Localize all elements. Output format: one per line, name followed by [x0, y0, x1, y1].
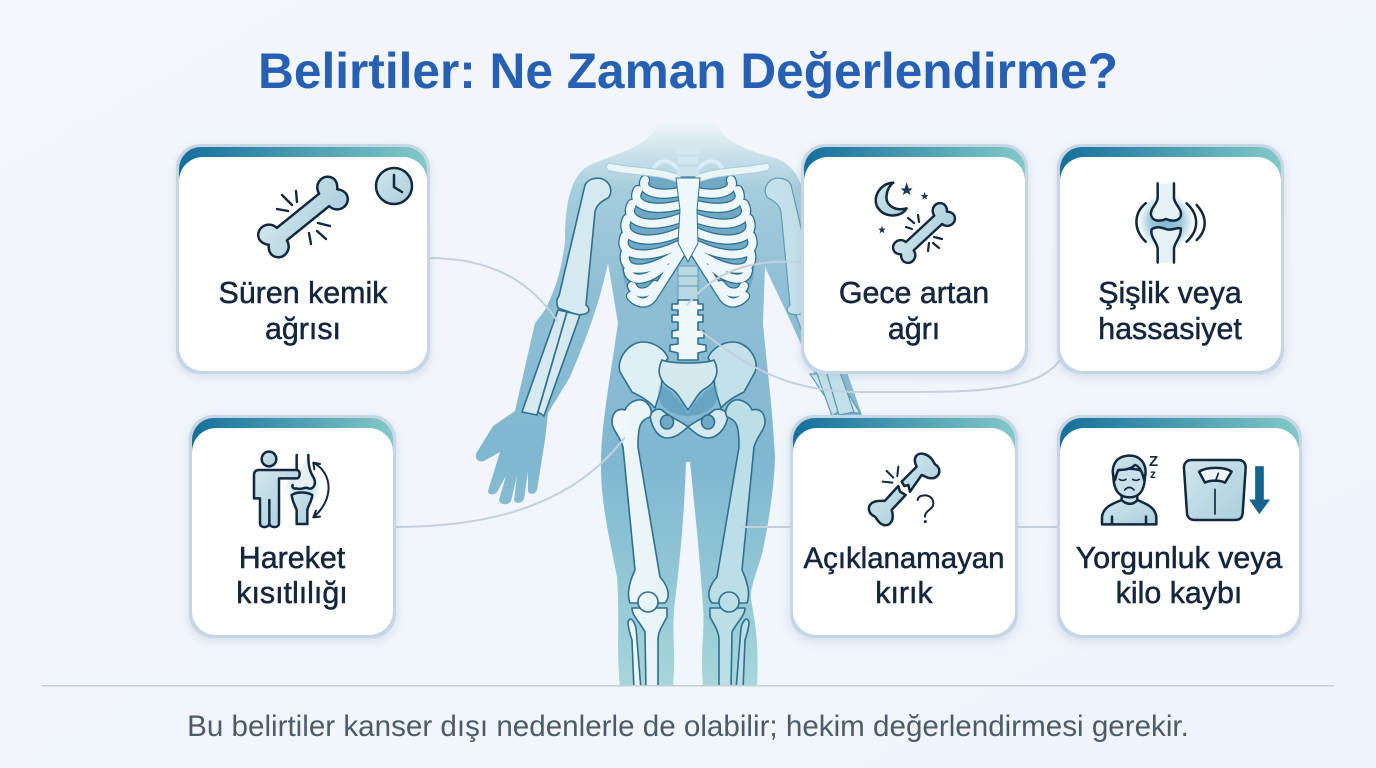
label line 2: kilo kaybı	[1116, 576, 1242, 610]
panel: Açıklanamayan kırık	[790, 415, 1018, 638]
limb bones right arm	[765, 178, 854, 416]
icon: limited movement	[254, 452, 329, 527]
icon: swollen joint	[1136, 183, 1205, 263]
label line 2: kırık	[875, 576, 933, 610]
panel: Şişlik veya hassasiyet	[1057, 144, 1284, 374]
footer note: Bu belirtiler kanser dışı nedenlerle de olabilir; hekim değerlendirmesi gerekir.	[187, 710, 1189, 743]
body silhouette	[476, 122, 862, 686]
upper spine	[676, 140, 700, 176]
label: Hareket	[239, 541, 346, 575]
label line 2: ağrısı	[265, 312, 341, 346]
label line 2: ağrı	[888, 312, 940, 346]
label: Süren kemik	[219, 276, 388, 310]
icon: pain sparks	[277, 191, 330, 244]
title: Belirtiler: Ne Zaman Değerlendirme?	[258, 43, 1118, 99]
label: Yorgunluk veya	[1076, 541, 1282, 575]
icon: moon and stars	[876, 182, 928, 233]
limb bones left leg	[612, 400, 668, 690]
ribcage cavity	[621, 176, 755, 305]
icon: sleep letters: Z	[1149, 453, 1158, 470]
panel: Hareket kısıtlılığı	[189, 415, 396, 638]
panel: Süren kemik ağrısı	[176, 144, 430, 374]
icon: night bone	[890, 200, 958, 266]
limb bones left arm	[522, 178, 611, 416]
panel: Yorgunluk veya kilo kaybı	[1057, 415, 1302, 638]
clip line below figure	[600, 686, 780, 694]
body illustration	[476, 122, 862, 694]
pelvis	[619, 342, 756, 438]
icon: sparks	[906, 215, 942, 251]
panel: Gece artan ağrı	[801, 144, 1028, 374]
limb bones right leg	[709, 400, 765, 690]
label: Açıklanamayan	[804, 542, 1004, 575]
icon: sleep letter small: z	[1150, 467, 1156, 481]
sternum	[676, 178, 700, 262]
icon: broken bone	[869, 454, 939, 525]
right forearm bones	[810, 374, 860, 413]
icon: tired person	[1102, 456, 1156, 524]
icon: clock	[376, 168, 412, 204]
divider	[42, 685, 1334, 686]
icon: aching bone	[254, 173, 352, 261]
ribs	[624, 180, 752, 302]
connectors	[394, 258, 1060, 527]
label line 2: hassasiyet	[1098, 312, 1242, 346]
label: Gece artan	[839, 276, 989, 310]
clavicles	[610, 167, 766, 178]
label: Şişlik veya	[1098, 276, 1242, 310]
icon: scale with arrow	[1184, 460, 1269, 520]
upper rib arcs	[654, 161, 722, 168]
label line 2: kısıtlılığı	[236, 576, 348, 610]
lumbar spine	[678, 266, 698, 303]
